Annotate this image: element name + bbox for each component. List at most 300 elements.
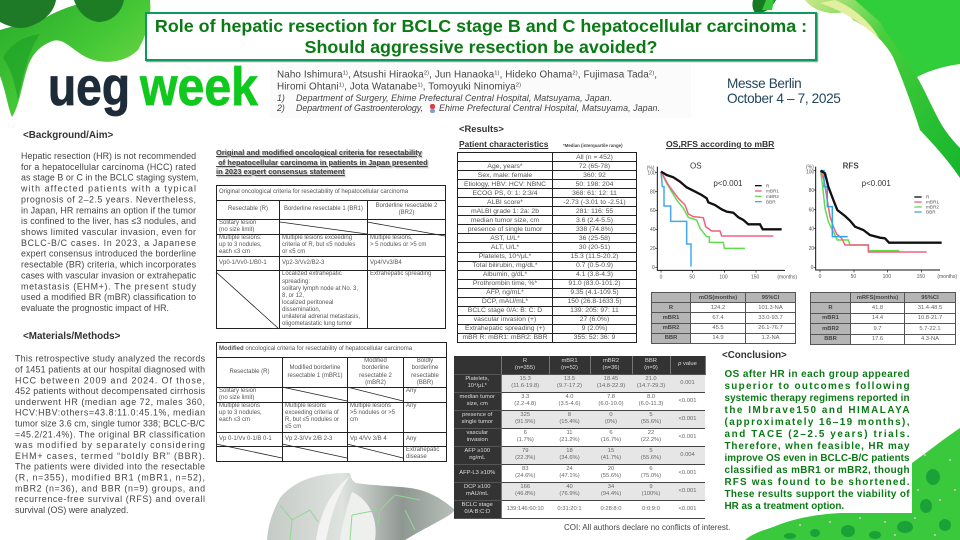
heading: patient characteristics: Patient characteristics [459,139,548,149]
table: characteristics by mBR group: 6 [524,430,527,436]
table: median OS [651,292,796,344]
table: median RFS: mBR1 [822,315,839,321]
table: original criteria: oligometastatic lung tumor [282,321,352,327]
text: conclusion [724,369,912,513]
text: materials and methods: HCC between 2009 and 2024. Of those, [15,375,205,385]
affiliations: 2) [276,103,285,113]
chart: overall survival: 150 [751,274,760,280]
table: patient characteristics: Age, years* [487,163,523,170]
table: original criteria: 8, or 12, [282,293,304,299]
table: characteristics by mBR group: (34.6%) [559,455,580,461]
chart: overall survival: R [766,183,770,188]
heading: OS RFS according to mBR: OS,RFS according to mBR [666,139,774,149]
table: median RFS: 5.7-22.1 [919,326,941,332]
table: original criteria: up to 3 nodules, [219,242,262,248]
table: characteristics by mBR group: 83 [522,466,528,472]
table: modified criteria: Boldly [417,358,433,364]
table: characteristics by mBR group: (9.7-17.2) [557,383,582,389]
table: characteristics by mBR group: 15 [608,448,614,454]
table: characteristics by mBR group: <0.001 [679,506,696,512]
table: median RFS: 41.8 [872,305,883,311]
author names: 1) [417,82,423,88]
table: characteristics by mBR group: 13.5 [564,376,575,382]
affiliations: 1) [277,93,285,103]
table: patient characteristics: vascular invasion (+) [474,316,536,323]
text: conclusion: OS after HR in each group appeared [724,369,910,380]
table: median RFS: R [828,305,833,311]
table: characteristics by mBR group: 5 [649,448,653,454]
table: characteristics by mBR group: 325 [520,412,530,418]
table: characteristics by mBR group: (22.3%) [515,455,535,461]
table: modified criteria: (mBR2) [365,380,386,386]
table: characteristics by mBR group: 166 [520,484,530,490]
table: patient characteristics: 36 (25-58) [579,235,610,242]
table: patient characteristics: mBR R: mBR1: mBR2: BBR [462,334,547,341]
table: original criteria: unilateral adrenal metastasis, [282,314,360,320]
table: original criteria: Resectable (R) [228,206,268,212]
table: modified criteria: resectable [411,372,439,378]
title box: Should aggressive resection be avoided? [305,37,657,57]
table: patient characteristics: DCP, mAU/mL* [482,298,528,305]
table: characteristics by mBR group: BCLC stage [462,502,493,508]
logo: ueg week: ueg [48,57,130,117]
table: modified criteria: Multiple lesions [285,403,326,409]
table: median OS: 1.2-NA [761,335,780,341]
author names: , Atsushi Hiraoka [348,70,424,80]
table: patient characteristics: 360: 92 [583,172,606,179]
chart: overall survival: 0 [660,274,663,280]
decoration: green watercolour top left [0,0,150,117]
text: conclusion: These results support the viability of [724,489,910,500]
chart: recurrence-free survival: 80 [809,188,814,194]
table: characteristics by mBR group: 8 [568,412,571,418]
text: background: BCLC-B/C cases. In 2023, a Japanese [21,238,196,248]
table: original criteria: Vp2-3/Vv2/B2-3 [282,260,324,266]
table: patient characteristics: Prothrombin time, %* [473,280,537,287]
text: conclusion: improve OS even in BCLC-B/C patients [724,453,910,464]
text: background: for a hepatocellular carcinoma (HCC) rated [21,162,196,172]
table: original criteria: Multiple lesions, [370,235,413,241]
chart: overall survival: 40 [650,227,656,233]
table: characteristics by mBR group: ng/mL [469,455,485,461]
table: median RFS: 9.7 [873,326,882,332]
table: characteristics by mBR group: (n=9) [644,365,658,371]
table: modified criteria: Vp 4/Vv 3/B 4 [350,436,387,442]
chart: overall survival: 60 [650,208,656,214]
decoration: green leaf bottom right [745,428,960,540]
chart: overall survival: mBR2 [766,194,779,199]
text: background: metastasis (EHM+). The present study [21,281,197,291]
text: background [20,151,198,313]
illustration: liver [267,473,454,540]
table: modified criteria: resectable 1 (mBR1) [287,372,343,378]
table: patient characteristics: AST, U/L* [490,235,520,242]
table: patient characteristics: AFP, ng/mL* [486,289,524,296]
table: median RFS: mRFS(months) [857,295,898,301]
author names: Naho Ishimura [277,70,342,80]
venue and dates: October 4 – 7, 2025 [727,91,841,106]
text: background: prognosis of 2–2.5 years. Nevertheless, [21,194,196,204]
text: materials and methods: of 1451 patients at our hospital diagnosed with [15,364,205,374]
table: characteristics by mBR group: (100%) [642,491,660,497]
table: characteristics by mBR group: (3.5-4.6) [559,401,580,407]
text: materials and methods: was modified by separately considering [14,440,205,450]
chart: recurrence-free survival: 50 [851,274,856,280]
text: background: with affected patients with a typical [20,184,196,194]
table: characteristics by mBR group: median tumor [460,394,495,400]
table: characteristics by mBR group: (n=36) [603,365,619,371]
table: patient characteristics [457,152,637,343]
table: modified criteria: (no size limit) [219,395,254,401]
table: modified criteria: Modified [364,358,387,364]
table: characteristics by mBR group: (76.9%) [559,491,580,497]
author names: , Hideko Ohama [500,70,573,80]
table: characteristics by mBR group: 139:146:60:10 [507,506,544,512]
table: patient characteristics: Albumin, g/dL* [483,271,527,278]
table: patient characteristics: 9 (2.0%) [582,325,607,332]
table: median OS: R [669,305,673,311]
table: characteristics by mBR group: 5 [649,412,653,418]
table: characteristics by mBR group: p value [678,361,697,367]
author names: 2) [424,70,429,76]
chart: recurrence-free survival: (months) [937,274,957,280]
note: median range: *Median (interquartile range) [563,143,623,148]
table: original criteria: Solitary lesion [219,220,256,226]
chart: overall survival: 100 [719,274,728,280]
chart: recurrence-free survival: p<0.001 [862,179,891,188]
table: patient characteristics: 30 (20-51) [579,244,610,251]
table: patient characteristics: Platelets, 10⁴/μL* [479,253,531,260]
table: characteristics by mBR group: single tumor [461,419,493,425]
chart: overall survival [646,162,797,280]
affiliations [276,93,660,113]
venue and dates: Messe Berlin [727,76,801,91]
table: modified criteria: resectable 2 [359,372,392,378]
text: background: evaluate the prognostic impact of HR. [21,303,169,313]
table: characteristics by mBR group: 79 [522,448,528,454]
author names: , Fujimasa Tada [578,70,649,80]
chart: recurrence-free survival: 20 [809,246,814,252]
table: characteristics by mBR group: 9 [649,484,653,490]
table: characteristics by mBR group: vascular [466,430,488,436]
table: median OS: 101.3-NA [758,305,783,311]
table: median OS: mOS(months) [699,295,737,301]
table: characteristics by mBR group: 4.0 [565,394,574,400]
chart: overall survival: OS [690,162,702,171]
table: patient characteristics: 72 (65-78) [579,163,610,170]
table: patient characteristics: 139: 205: 97: 11 [570,307,619,314]
table: characteristics by mBR group: 21.0 [645,376,657,382]
table: characteristics by mBR group: mBR1 [561,358,578,364]
table: original criteria [216,185,446,330]
table: original criteria: spreading: [282,279,310,285]
text: background: Hepatic resection (HR) is not recommended [21,151,196,161]
table: characteristics by mBR group: AFP-L3 ≥10% [459,470,495,476]
table: patient characteristics: Etiology, HBV: HCV: NBNC [464,181,546,188]
chart: recurrence-free survival: mBR2 [926,205,939,210]
table: median RFS: 4.3-NA [921,336,939,342]
table: characteristics by mBR group: (55.6%) [601,473,621,479]
table: patient characteristics: ALT, U/L* [491,244,519,251]
table: patient characteristics: Total bilirubin, mg/dL* [472,262,537,269]
heading: criteria tables: in 2023 expert consensus statement [216,167,345,176]
heading: materials and methods: <Materials/Methods> [23,331,120,342]
table: characteristics by mBR group: (16.7%) [601,437,621,443]
chart: recurrence-free survival: RFS [843,162,859,171]
table: characteristics by mBR group: 7.8 [607,394,615,400]
venue and dates [727,76,841,106]
table: modified criteria: Any [406,403,416,409]
table: patient characteristics: 338 (74.8%) [576,226,613,233]
table: original criteria: Borderline resectable 1 (BR1) [284,206,363,212]
chart: overall survival: 20 [650,246,656,252]
table: characteristics by mBR group: <0.001 [679,416,696,422]
table: median RFS: BBR [824,336,837,342]
table: characteristics by mBR group [454,356,706,519]
table: median OS: 67.4 [712,315,724,321]
table: modified criteria: up to 3 nodules, [219,410,262,416]
chart: recurrence-free survival: 60 [809,207,814,213]
chart: recurrence-free survival: 100 [806,170,815,176]
table: modified criteria: borderline [412,365,438,371]
table: characteristics by mBR group: <0.001 [679,398,696,404]
logo: ueg week: week [139,57,259,117]
text: materials and methods: mBR2 (n=36), and BBR (n=9) groups, and [15,483,205,493]
table: characteristics by mBR group: mAU/mL [466,491,489,497]
decoration: green watercolour top right [752,0,960,178]
table: modified criteria: Vp 0-1/Vv 0-1/B 0-1 [219,436,272,442]
table: characteristics by mBR group: (55.6%) [641,455,661,461]
table: characteristics by mBR group: 6 [609,430,613,436]
table: characteristics by mBR group: <0.001 [679,434,696,440]
text: conclusion: HR as a treatment option. [724,501,844,512]
table: patient characteristics: ALBI score* [487,199,523,206]
table: characteristics by mBR group: 10⁴/μL* [468,383,487,389]
heading: results: <Results> [459,123,504,134]
table: median RFS: 95%CI [921,295,939,301]
title box: Role of hepatic resection for BCLC stage B and C hepatocellular carcinoma : [155,16,807,36]
table: patient characteristics: Sex, male: female [478,172,532,179]
table: original criteria: solitary lymph node at No. 3, [282,286,358,292]
table: characteristics by mBR group: 18.45 [604,376,618,382]
table: characteristics by mBR group: 8.0 [647,394,655,400]
text: conclusion: Therefore, when feasible, HR may [724,441,910,452]
table: patient characteristics: BCLC stage 0/A: B: C: D [468,307,542,314]
table: original criteria: dissemination, [282,307,320,313]
title box [145,12,817,61]
table: characteristics by mBR group: (47.1%) [559,473,580,479]
table: patient characteristics: 281: 116: 55 [576,208,613,215]
table: modified criteria: exceeding criteria of [285,410,339,416]
table: characteristics by mBR group: (11.6-19.8) [511,383,539,389]
table: modified criteria: Modified oncological criteria for resectability of hepatocellular carcinoma [219,346,412,352]
table: modified criteria: Extrahepatic [406,447,439,453]
table: modified criteria: >5 nodules or >5 [350,410,395,416]
table: patient characteristics: median tumor size, cm [471,217,539,224]
text: materials and methods: survival (OS) were analyzed. [15,505,128,515]
heading: criteria tables: of hepatocellular carcinoma in patients in Japan presented [218,158,428,166]
chart: recurrence-free survival: mBR1 [926,200,939,205]
table: characteristics by mBR group: 0.001 [680,380,695,386]
table: median OS: 26.1-76.7 [758,325,783,331]
table: patient characteristics: All (n = 452) [576,154,613,161]
table: characteristics by mBR group: 24 [566,466,573,472]
table: median OS: 45.5 [712,325,724,331]
chart: overall survival: 100 [647,170,656,176]
table: characteristics by mBR group: (0%) [605,419,617,425]
table: characteristics by mBR group: (91.5%) [515,419,535,425]
table: characteristics by mBR group: (15.4%) [559,419,580,425]
table: original criteria: criteria of R, but ≤5 nodules [282,242,355,248]
text: background: is confined to the liver, has ≤3 nodules, and [21,216,196,226]
table: characteristics by mBR group: DCP ≥100 [464,484,491,490]
heading: conclusion: <Conclusion> [722,350,787,361]
table: patient characteristics: 0.7 (0.5-0.9) [576,262,613,269]
affiliations: Ehime Prefectural Central Hospital, Matsuyama, Japan. [439,103,660,113]
text: conclusion: and TACE (2–2.5 years) trials. [724,429,910,440]
table: modified criteria: Any [406,436,416,442]
table: characteristics by mBR group: 18 [566,448,573,454]
table: modified criteria: Multiple lesions [219,403,260,409]
table: characteristics by mBR group: <0.001 [679,488,696,494]
table: modified criteria: Multiple lesions [350,403,391,409]
table: median RFS: 31.4-48.5 [918,305,942,311]
author names: , Tomoyuki Ninomiya [423,82,516,92]
note: conflict of interest: COI: All authors declare no conflicts of interest. [564,523,730,532]
chart: recurrence-free survival: (%) [806,165,814,171]
text: conclusion: the IMbrave150 and HIMALAYA [724,405,910,416]
author names: , Jota Watanabe [344,82,418,92]
chart: recurrence-free survival: 150 [917,274,925,280]
table: median RFS: mBR2 [822,326,839,332]
table: modified criteria: disease [406,454,427,460]
chart: overall survival: (%) [647,165,655,171]
table: characteristics by mBR group: <0.001 [679,470,696,476]
table: characteristics by mBR group: (94.4%) [601,491,621,497]
table: patient characteristics: 4.1 (3.8-4.3) [576,271,613,278]
table: patient characteristics: -2.73 (-3.01 to -2.51) [563,199,626,206]
chart: overall survival: 50 [689,274,695,280]
text: background: in Japan, HR remains an option if the tumor [21,205,196,215]
table: characteristics by mBR group: (22.2%) [641,437,661,443]
table: median RFS: 17.6 [872,336,883,342]
table: characteristics by mBR group: size, cm [467,401,488,407]
chart: overall survival: mBR1 [766,189,779,194]
author names: Hiromi Ohtani [277,82,339,92]
authors and affiliations [270,64,691,118]
table: original criteria: Original oncological criteria for resectability of hepatocellular carcinoma [219,189,408,195]
table: characteristics by mBR group: (6.0-11.3) [639,401,663,407]
table: original criteria: (BR2) [399,210,414,216]
table: modified criteria: Resectable (R) [229,369,270,375]
table: characteristics by mBR group: (21.2%) [559,437,580,443]
table: characteristics by mBR group: 0/A:B:C:D [464,509,490,515]
table: original criteria: Multiple lesions: [219,235,262,241]
table: modified criteria: cm [350,417,358,423]
table: characteristics by mBR group: (14.8-22.9) [597,383,625,389]
table: characteristics by mBR group: (6.0-10.0) [598,401,624,407]
table: characteristics by mBR group: (55.6%) [641,419,661,425]
author names: 1) [494,70,500,76]
table: characteristics by mBR group: (46.8%) [515,491,535,497]
table: patient characteristics: 27 (6.0%) [580,316,609,323]
heading: criteria tables [216,148,430,178]
table: original criteria: Vp0-1/Vv0-1/B0-1 [219,260,267,266]
table: modified criteria: (BBR) [417,380,433,386]
table: patient characteristics: 15.3 (11.5-20.2) [571,253,618,260]
chart: overall survival: 0 [652,265,655,271]
table: characteristics by mBR group: 34 [608,484,614,490]
table: original criteria: Vp4/Vv3/B4 [370,260,402,266]
chart: recurrence-free survival: 100 [883,274,891,280]
table: modified criteria: Vp 2-3/Vv 2/B 2-3 [285,436,332,442]
chart: recurrence-free survival: 0 [811,265,814,271]
table: original criteria: > 5 nodules or >5 cm [370,242,426,248]
table: patient characteristics: 9.35 (4.1-109.5) [570,289,619,296]
text: materials and methods: The patients were divided into the resectable [15,462,205,472]
table: median OS: mBR1 [663,315,679,321]
table: characteristics by mBR group: AFP ≥100 [464,448,490,454]
author names [277,70,657,92]
heading: criteria tables: Original and modified oncological criteria for resectability [216,148,422,157]
chart: overall survival: p<0.001 [713,179,743,188]
table: modified criteria: Any [406,388,416,394]
table: patient characteristics: mALBI grade 1: 2a: 2b [471,208,539,215]
table: characteristics by mBR group: 11 [566,430,573,436]
table: patient characteristics: presence of single tumor [468,226,542,233]
affiliations: Department of Gastroenterology, [296,103,423,113]
table: characteristics by mBR group: (41.7%) [601,455,621,461]
table: characteristics by mBR group: 20 [608,466,614,472]
text: conclusion: systemic therapy regimens reported in [724,393,910,404]
chart: recurrence-free survival: BBR [926,210,936,215]
table: original criteria: Extrahepatic spreading [370,271,431,277]
table: characteristics by mBR group: 0:0:9:0 [642,506,660,512]
table: modified criteria: each ≤3 cm [219,417,250,423]
table: median RFS [810,292,956,345]
table: characteristics by mBR group: (n=355) [515,365,535,371]
table: characteristics by mBR group: 22 [648,430,654,436]
table: characteristics by mBR group: invasion [467,437,488,443]
author names: 2) [649,70,654,76]
table: median OS: mBR2 [663,325,679,331]
text: materials and methods: 452 patients without decompensated cirrhosis [15,386,206,396]
table: median RFS: 10.8-21.7 [918,315,942,321]
text: materials and methods: recurrence-free survival (RFS) and overall [15,494,205,504]
author names: , [654,70,657,80]
table: characteristics by mBR group: 15.3 [520,376,531,382]
text: materials and methods: underwent HR (median age 72, males 360, [15,397,205,407]
table: characteristics by mBR group: 0:31:20:1 [557,506,582,512]
text: background: cases with vascular invasion or extrahepatic [21,270,197,280]
logo: ueg week [48,57,259,117]
table: patient characteristics: 91.0 (83.0-101.2) [568,280,621,287]
table: characteristics by mBR group: 0:28:8:0 [601,506,621,512]
table: characteristics by mBR group: (2.2-4.8) [514,401,536,407]
text: materials and methods: =45.2/21.4%). The original BR classification [15,429,205,439]
table: characteristics by mBR group: (n=52) [561,365,578,371]
chart: recurrence-free survival [806,162,957,280]
table: original criteria: Multiple lesions exceeding [282,235,352,241]
table: patient characteristics: ECOG PS, 0: 1: 2:3/4 [472,190,537,197]
table: median OS: 95%CI [762,295,779,301]
table: characteristics by mBR group: mBR2 [603,358,619,364]
text: conclusion: (approximately 16–19 months), [724,417,910,428]
table: original criteria: Borderline resectable 2 [376,203,437,209]
table: modified criteria: borderline [362,365,389,371]
table: characteristics by mBR group: R [523,358,527,364]
chart: overall survival: (months) [777,274,797,280]
